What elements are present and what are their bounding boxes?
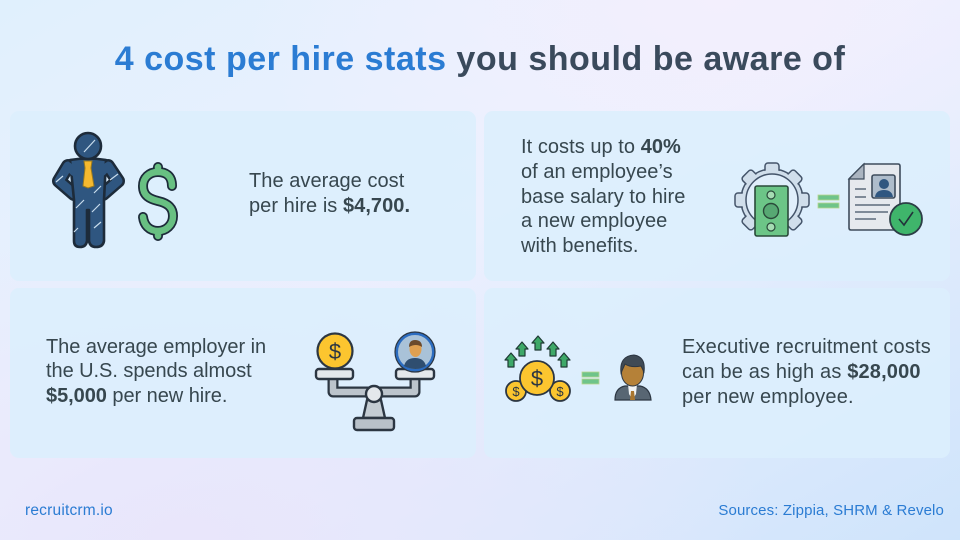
text: base salary: It costs up to 40% <box>521 136 681 158</box>
text: base salary: a new employee <box>521 210 667 232</box>
footer: sources: Sources: Zippia, SHRM & Revelo <box>718 502 944 519</box>
icon: coins with arrows: $ <box>556 384 564 399</box>
text: average cost: per hire is $4,700. <box>249 195 410 217</box>
text: base salary: base salary to hire <box>521 186 685 208</box>
text: employer spend: The average employer in <box>46 336 266 358</box>
icon: coins with arrows <box>505 336 570 401</box>
icon: balance scale with coin and person <box>316 332 435 430</box>
icon: dollar sign <box>143 167 173 236</box>
icon: resume with check <box>849 164 922 235</box>
text: average cost: The average cost <box>249 170 404 192</box>
icon: equals sign <box>582 372 599 384</box>
panel: executive recruitment <box>484 288 950 458</box>
icon: executive <box>615 355 651 400</box>
text: employer spend: $5,000 per new hire. <box>46 385 227 407</box>
text: executive recruitment: Executive recruitment costs <box>682 336 931 358</box>
icon: businessman <box>56 133 118 247</box>
text: employer spend: the U.S. spends almost <box>46 360 252 382</box>
title: 4 cost per hire stats you should be aware of <box>115 40 845 78</box>
icon: coins with arrows: $ <box>512 384 520 399</box>
text: executive recruitment: per new employee. <box>682 386 854 408</box>
footer: brand: recruitcrm.io <box>25 502 113 519</box>
icon: balance scale with coin and person: $ <box>329 339 341 364</box>
icon: gear and banknote <box>735 163 809 236</box>
text: executive recruitment: can be as high as $28,000 <box>682 361 921 383</box>
panel: average cost per hire <box>10 111 476 281</box>
icon: coins with arrows: $ <box>531 366 543 391</box>
text: base salary: of an employee’s <box>521 161 673 183</box>
icon: equals sign <box>818 195 839 208</box>
panel: 40% of base salary <box>484 111 950 281</box>
text: base salary: with benefits. <box>520 235 638 257</box>
panel: average employer spend <box>10 288 476 458</box>
